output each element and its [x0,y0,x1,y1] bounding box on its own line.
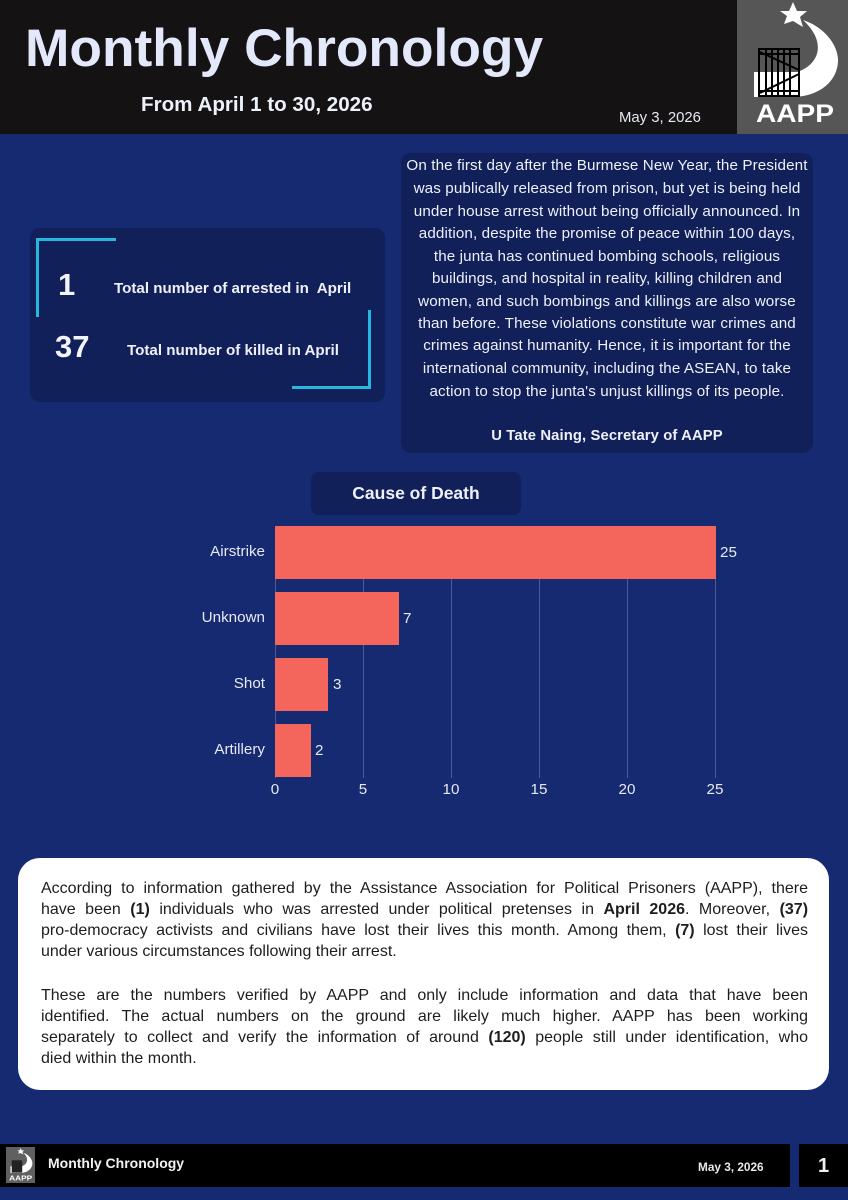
subtitle: date range: From April 1 to 30, 2026 [141,93,373,116]
bar: Unknown 7 [202,592,411,645]
paragraph: verification: These are the numbers verified by AAPP and only include information and data that have been [41,987,808,1004]
bar: Shot 3: Shot [234,675,265,692]
panel: quote [401,153,813,453]
chart heading: Cause of Death [311,472,521,515]
quote text: addition, despite the promise of peace within 100 days, [419,225,795,242]
x axis labels [271,781,723,798]
bar chart: cause of death [202,526,737,798]
page number [799,1144,848,1187]
paragraph: counts: under various circumstances following their arrest. [41,943,397,960]
top-left corner accent [36,238,116,317]
stat: killed number: 37 [55,329,89,364]
quote text: buildings, and hospital in reality, killing children and [432,270,782,287]
page number: 1 [818,1155,829,1177]
panel: totals [30,228,385,402]
logo: AAPP [737,0,848,134]
bar: Shot 3: 3 [333,676,341,693]
stat: arrested label: Total number of arrested in April [114,280,351,297]
x axis labels: 25 [707,781,723,798]
stat: arrested number: 1 [58,267,75,302]
bar: Airstrike 25 [210,526,737,579]
paragraph: verification: died within the month. [41,1050,197,1067]
panel: summary text [18,858,829,1090]
x axis labels: 20 [619,781,635,798]
footer title: Monthly Chronology [48,1155,184,1171]
quote text: women, and such bombings and killings are also worse [418,293,796,310]
quote text: under house arrest without being officially announced. In [414,203,800,220]
bar: Artillery 2: 2 [315,742,323,759]
x axis labels: 15 [531,781,547,798]
quote text [406,157,808,444]
paragraph: counts: According to information gathered by the Assistance Association for Political Prisoners (AAPP), there [41,880,808,897]
bar: Airstrike 25: 25 [720,544,737,561]
logo wordmark: AAPP [756,100,834,128]
footer logo [6,1147,35,1183]
paragraph: counts: have been (1) individuals who was arrested under political pretenses in April 2026. Moreover, (37) [41,901,808,918]
quote text: U Tate Naing, Secretary of AAPP [491,428,723,444]
bar: Unknown 7: 7 [403,610,411,627]
stat: killed label: Total number of killed in April [127,342,339,359]
x axis labels: 5 [359,781,367,798]
paragraph: counts [41,880,808,960]
footer logo: AAPP [9,1173,32,1182]
chart heading: Cause of Death: Cause of Death [352,483,480,503]
x axis labels: 10 [443,781,459,798]
publication date: May 3, 2026 [619,110,701,126]
footer bar [0,1144,790,1187]
title: Monthly Chronology [25,19,543,78]
quote text: was publically released from prison, but yet is being held [414,180,800,197]
paragraph: verification: identified. The actual numbers on the ground are likely much higher. AAPP has been working [41,1008,808,1025]
quote text: the junta has continued bombing schools, religious [434,248,780,265]
paragraph: counts: pro-democracy activists and civilians have lost their lives this month. Among them, (7) lost their lives [41,922,808,939]
quote text: crimes against humanity. Hence, it is important for the [423,337,791,354]
bar: Unknown 7: Unknown [202,609,265,626]
bottom-right corner accent [292,310,371,389]
paragraph: verification [41,987,808,1067]
quote text: On the first day after the Burmese New Year, the President [406,157,808,174]
paragraph: verification: separately to collect and verify the information of around (120) people still under identification, who [41,1029,808,1046]
bar: Artillery 2 [214,724,323,777]
bar: Artillery 2: Artillery [214,741,265,758]
bar: Shot 3 [234,658,341,711]
quote text: action to stop the junta's unjust killings of its people. [429,383,785,400]
footer date: May 3, 2026 [698,1160,764,1174]
quote text: international community, including the ASEAN, to take [423,360,791,377]
quote text: than before. These violations constitute war crimes and [418,315,796,332]
x axis labels: 0 [271,781,279,798]
bar: Airstrike 25: Airstrike [210,543,265,560]
header band [0,0,848,134]
